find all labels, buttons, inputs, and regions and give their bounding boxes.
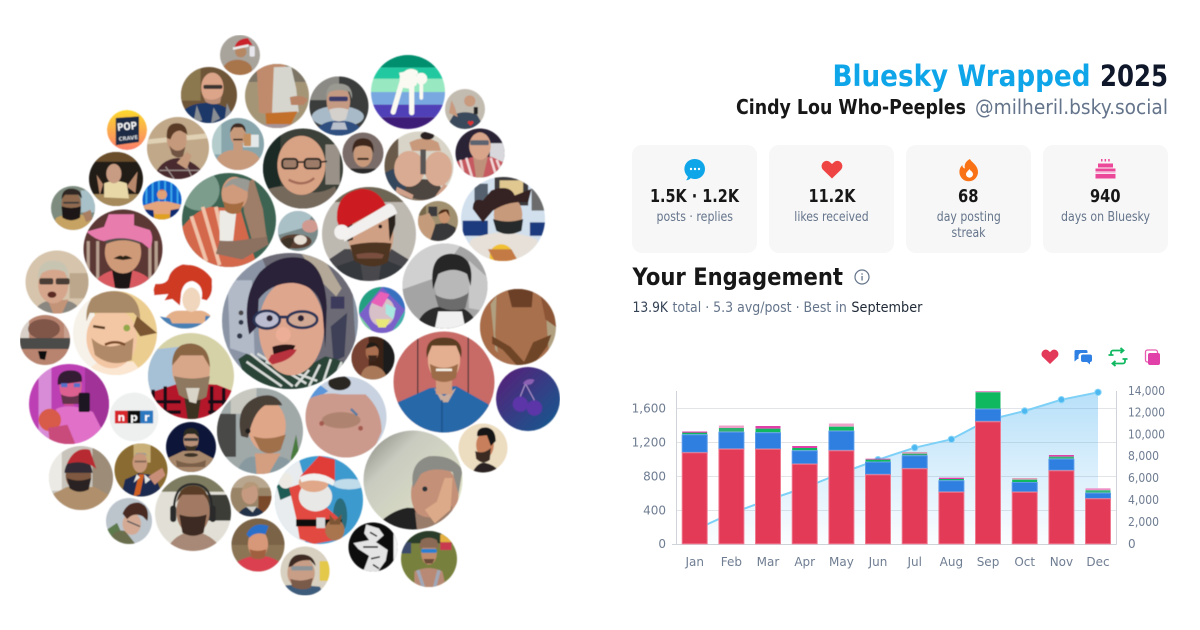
- left axis labels: 1,200: [632, 436, 666, 450]
- month labels: Aug: [940, 555, 963, 569]
- right axis labels: 12,000: [1128, 406, 1165, 420]
- bar: September: [976, 391, 1000, 544]
- avatar: black bearded man: [51, 186, 95, 230]
- stat card: day posting streak: 68: [958, 186, 978, 207]
- avatar: man covering face in gray room: [364, 430, 462, 530]
- avatar: pop crave logo: POP: [117, 120, 138, 134]
- avatar: man with hat and sunglasses at festival: [401, 531, 457, 587]
- left axis labels: 0: [658, 537, 666, 551]
- avatar: bald man in argyle sweater: [180, 66, 238, 124]
- avatar: man with peace sign in plaid: [445, 89, 485, 129]
- right axis labels: 2,000: [1128, 515, 1159, 529]
- left axis labels: 400: [643, 504, 666, 518]
- engagement summary line: [632, 300, 923, 316]
- avatar: young man with mustache: [342, 132, 384, 174]
- avatar: man with headphones hands behind head: [418, 201, 458, 241]
- avatar: man in santa hat with dark beard: [49, 446, 113, 510]
- stat card: likes received: [769, 145, 894, 253]
- avatar: tattooed man in orange shirt: [178, 169, 276, 267]
- grid lines: [676, 408, 1116, 510]
- month labels: Nov: [1050, 555, 1073, 569]
- stat card: posts and replies: [632, 145, 757, 253]
- stat card: likes received: likes received: [794, 210, 869, 225]
- stat card: likes received: 11.2K: [808, 186, 856, 207]
- stacked bars: [682, 391, 1110, 544]
- avatar: man with curly hair and beard: [217, 388, 303, 474]
- right axis labels: 10,000: [1128, 428, 1165, 442]
- avatar: shirtless man with glasses on dark blue: [166, 422, 216, 472]
- month labels: Apr: [794, 555, 815, 569]
- icon: chat bubble: [684, 159, 705, 180]
- right axis labels: 6,000: [1128, 471, 1159, 485]
- title: Bluesky Wrapped: [832, 59, 1090, 93]
- stat card: posts and replies: 1.5K · 1.2K: [650, 186, 740, 207]
- avatar: cartoon man in backwards cap: [73, 291, 157, 375]
- avatar: man in santa hat: [322, 187, 416, 281]
- stat card: day posting streak: day posting: [937, 210, 1001, 225]
- avatar: man at restaurant with peace sign: [89, 152, 143, 206]
- month labels: Oct: [1014, 555, 1035, 569]
- engagement summary line: September: [851, 300, 923, 316]
- month labels: [684, 555, 1110, 569]
- month labels: Dec: [1086, 555, 1110, 569]
- avatar: man with blue mohawk: [232, 518, 284, 572]
- avatar: dog on blanket: [278, 211, 318, 251]
- bar: April: [792, 446, 817, 544]
- engagement chart: [632, 384, 1165, 569]
- bar: November: [1049, 455, 1074, 544]
- chart legend icons: [1042, 348, 1160, 366]
- avatar: cherries icon: [496, 367, 560, 431]
- avatar: senator in suit pointing: [114, 444, 168, 496]
- avatar: striped pride flag with figure: [371, 55, 445, 129]
- avatar: npr logo: r: [144, 411, 150, 424]
- bar: August: [939, 478, 964, 544]
- avatar: man with messy hair and glasses: [106, 498, 152, 544]
- engagement summary line: total · 5.3 avg/post · Best in: [672, 300, 847, 316]
- legend: replies: [1074, 350, 1092, 364]
- bar: February: [719, 426, 744, 544]
- avatar: pop crave logo: CRAVE: [118, 135, 139, 143]
- avatar: bearded man in profile on beige: [458, 424, 508, 472]
- bar: January: [682, 432, 707, 544]
- avatar: npr logo: [110, 392, 158, 442]
- avatar: man with glasses at the bottom: [280, 546, 330, 596]
- user name and handle: Cindy Lou Who-Peeples: [736, 95, 966, 119]
- stat card: posts and replies: posts · replies: [656, 210, 733, 225]
- stat card: days on Bluesky: 940: [1090, 186, 1120, 207]
- avatar: gray bearded man with glasses in car: [310, 76, 368, 136]
- month labels: Feb: [721, 555, 742, 569]
- cumulative dots: [875, 389, 1101, 463]
- avatar: red haired cartoon hero: [153, 264, 217, 328]
- cumulative line: [695, 392, 1098, 530]
- icon: flame: [959, 159, 978, 181]
- left axis labels: [632, 402, 666, 551]
- avatar: nude back: [384, 132, 454, 200]
- axes: [672, 391, 1116, 544]
- avatar: npr logo: p: [130, 411, 138, 424]
- avatar: black and white sketch: [348, 522, 398, 572]
- avatar: man thinking in plaid shirt: [147, 117, 209, 179]
- avatar: bearded man with headphones: [155, 475, 231, 551]
- avatar: npr logo: n: [117, 411, 125, 424]
- avatar: man in pink striped shirt: [456, 128, 504, 178]
- right axis labels: 0: [1128, 537, 1136, 551]
- avatar: rainbow glitch portrait: [359, 287, 405, 333]
- avatar: pink lit selfie with cat: [29, 364, 109, 444]
- avatar: bald man with big glasses selfie: [263, 128, 343, 208]
- month labels: Jul: [906, 555, 922, 569]
- avatar: main profile, man with glasses and tongue out: [222, 253, 358, 389]
- avatar: bare chest with gray censor bar: [20, 315, 70, 365]
- right axis labels: 4,000: [1128, 493, 1159, 507]
- icon: heart: [822, 161, 842, 178]
- right axis labels: [1128, 384, 1165, 551]
- month labels: Mar: [757, 555, 779, 569]
- month labels: Sep: [977, 555, 999, 569]
- stat card: day posting streak: streak: [952, 226, 986, 241]
- right axis labels: 14,000: [1128, 384, 1165, 398]
- bar: March: [756, 426, 780, 544]
- avatar: santa claus and rudolph figurine: [275, 456, 365, 544]
- avatar: black and white photo of man on pillow: [402, 244, 488, 328]
- legend: reposts: [1108, 348, 1128, 366]
- legend: likes: [1042, 350, 1058, 364]
- right axis labels: 8,000: [1128, 449, 1159, 463]
- avatar: surprised man with white hair and glasses: [26, 250, 88, 314]
- avatar: small dark portrait of bearded man: [352, 336, 394, 380]
- bar: December: [1086, 488, 1110, 544]
- month labels: May: [829, 555, 854, 569]
- engagement summary line: 13.9K: [632, 300, 669, 316]
- left axis labels: 1,600: [632, 402, 666, 416]
- avatar: hairy torso with leopard underwear: [480, 289, 556, 365]
- month labels: Jun: [868, 555, 887, 569]
- icon: cake: [1096, 159, 1116, 178]
- avatar: shirtless man with mustache: [212, 118, 264, 170]
- avatar: muscle man in tank top: [245, 64, 309, 129]
- stat card: days on Bluesky: [1043, 145, 1168, 253]
- bar: May: [829, 424, 854, 544]
- user name and handle: @milheril.bsky.social: [975, 95, 1168, 119]
- bar: June: [866, 459, 890, 544]
- avatar: man in pink cowboy hat: [84, 210, 162, 288]
- bar: July: [902, 452, 927, 544]
- bar: October: [1012, 478, 1037, 544]
- avatar: small smiling man: [230, 476, 272, 516]
- avatar: santa hat mirror selfie: [220, 35, 260, 79]
- stat card: days on Bluesky: days on Bluesky: [1061, 210, 1150, 225]
- title: 2025: [1100, 59, 1168, 93]
- stat card: day posting streak: [906, 145, 1031, 253]
- left axis labels: 800: [643, 470, 666, 484]
- avatar: smiling man in blue shirt on red wall: [394, 332, 494, 432]
- avatar collage: [20, 35, 560, 596]
- user name and handle: [736, 95, 1168, 119]
- avatar: shirtless man on blue curtain: [142, 180, 182, 220]
- avatar: bearded man in cowboy hat: [461, 177, 545, 268]
- legend: quotes: [1146, 350, 1160, 365]
- month labels: Jan: [684, 555, 704, 569]
- avatar: bearded man in red plaid: [148, 333, 234, 419]
- avatar: pop crave logo: [107, 110, 147, 150]
- cumulative area: [695, 392, 1098, 544]
- avatar: tattooed bare chest against sky: [306, 376, 386, 458]
- icon: info: [855, 270, 869, 284]
- heading: your engagement: Your Engagement: [632, 263, 843, 291]
